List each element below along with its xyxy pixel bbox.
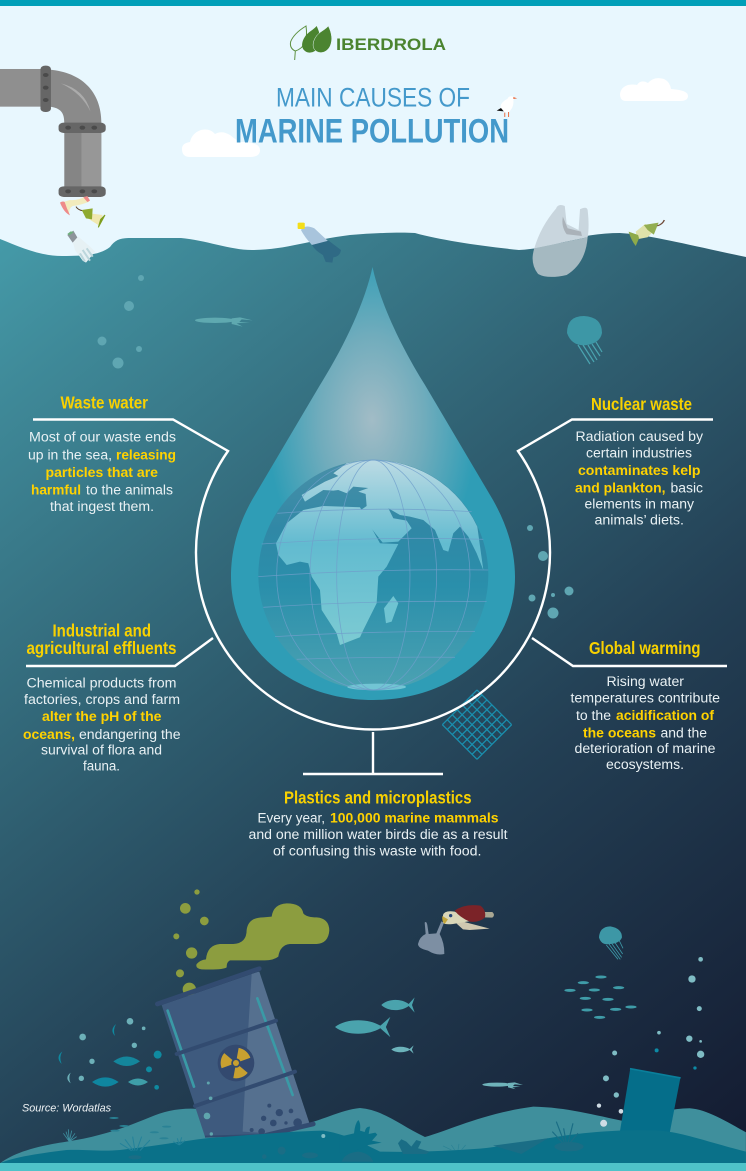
title line 1: MAIN CAUSES OF xyxy=(276,82,470,112)
leader lower left xyxy=(26,638,213,666)
title xyxy=(235,82,509,150)
globe xyxy=(258,460,488,690)
icon: drain pipe xyxy=(0,66,106,197)
body text: alter the pH of the xyxy=(42,709,162,724)
body text xyxy=(28,430,176,514)
water drop with globe xyxy=(231,267,515,700)
heading: Plastics and microplastics xyxy=(284,788,472,808)
radiation symbol xyxy=(218,1045,254,1081)
upper bubbles xyxy=(98,275,144,368)
floating glove xyxy=(67,231,95,263)
seabed plants and rocks xyxy=(63,1117,325,1159)
bag xyxy=(418,921,444,955)
body text: and plankton, xyxy=(575,480,666,496)
body text: Most of our waste ends xyxy=(29,430,176,444)
pear core floating xyxy=(629,220,664,246)
icon: turtle with plastic bag xyxy=(418,905,494,955)
body text: particles that are xyxy=(46,465,158,480)
floating bottle xyxy=(298,223,341,263)
seabed plants right xyxy=(398,1122,584,1154)
body text: that ingest them. xyxy=(50,499,154,514)
heading: Nuclear waste xyxy=(591,394,692,414)
body text: to the xyxy=(576,708,611,723)
globe stand outline and leader lines xyxy=(26,420,727,774)
icon: toxic slime cloud xyxy=(173,889,329,996)
elbow xyxy=(50,70,101,123)
heading: Waste water xyxy=(60,392,148,412)
body text: Radiation caused by xyxy=(576,429,703,444)
body text: endangering the xyxy=(79,727,180,742)
body text: temperatures contribute xyxy=(570,690,720,706)
heading: agricultural effluents xyxy=(26,638,177,658)
body text: harmful xyxy=(31,482,81,498)
seabed front layer xyxy=(0,1130,746,1170)
three large fish xyxy=(335,997,415,1054)
body text: the oceans xyxy=(583,726,656,740)
vertical pipe xyxy=(64,132,83,187)
panel: waste water xyxy=(28,392,176,514)
drop xyxy=(231,267,515,700)
body text: oceans, xyxy=(23,727,75,742)
body text: ecosystems. xyxy=(606,757,684,772)
teal barrel xyxy=(620,1068,681,1133)
icon: jellyfish upper xyxy=(567,316,602,364)
body text: and the xyxy=(660,726,707,740)
land: Africa xyxy=(276,506,398,645)
school of small fish xyxy=(564,975,637,1019)
body text: Rising water xyxy=(606,674,685,689)
body text: and one million water birds die as a result xyxy=(248,827,508,842)
body text: fauna. xyxy=(83,758,120,774)
body text: elements in many xyxy=(584,496,694,512)
panel: global warming xyxy=(570,638,720,772)
source note: Source: Wordatlas xyxy=(22,1102,111,1114)
coral centre xyxy=(302,1120,382,1162)
globe grid xyxy=(258,460,488,690)
heading: Global warming xyxy=(589,638,700,658)
bottom bar xyxy=(0,1163,746,1171)
icon: squid xyxy=(195,317,253,327)
leader lower right xyxy=(532,638,727,666)
body text: acidification of xyxy=(616,708,715,723)
logo: Iberdrola xyxy=(290,26,446,60)
body text: to the animals xyxy=(86,482,173,498)
panel: nuclear waste xyxy=(575,394,703,528)
heading xyxy=(26,620,177,658)
body text: certain industries xyxy=(586,446,692,460)
right bubbles xyxy=(527,525,574,618)
horizontal pipe xyxy=(0,69,43,107)
body text xyxy=(248,810,508,858)
cloud right xyxy=(620,78,688,101)
icon: seagull xyxy=(497,96,517,117)
body text: releasing xyxy=(116,448,176,462)
icon: squid lower xyxy=(482,1082,523,1089)
logo leaves xyxy=(290,26,332,60)
falling rubbish: apple core, pear core xyxy=(60,196,105,227)
panel: plastics and microplastics xyxy=(248,788,508,858)
body text: 100,000 marine mammals xyxy=(330,810,498,826)
logo wordmark: IBERDROLA xyxy=(336,35,446,54)
icon: jellyfish lower xyxy=(599,926,623,959)
title line 2: MARINE POLLUTION xyxy=(235,112,509,150)
turtle xyxy=(485,912,494,918)
body text: survival of flora and xyxy=(41,742,162,758)
body text: deterioration of marine xyxy=(574,741,716,756)
body text: animals’ diets. xyxy=(594,512,684,528)
body text: contaminates kelp xyxy=(578,463,700,478)
body text: of confusing this waste with food. xyxy=(273,844,482,858)
stand xyxy=(303,732,443,774)
body text: Chemical products from xyxy=(26,676,176,690)
icon: radioactive barrel xyxy=(157,969,313,1137)
panel: industrial and agricultural effluents xyxy=(23,620,180,774)
land: Madagascar xyxy=(384,596,398,623)
top bar xyxy=(0,0,746,6)
land: Eurasia xyxy=(302,460,483,570)
flanges xyxy=(40,66,51,112)
body text: basic xyxy=(670,480,703,496)
fishing net xyxy=(442,690,512,759)
seabed back layer xyxy=(0,1107,746,1170)
body text xyxy=(23,676,180,774)
body text: Every year, xyxy=(258,810,325,826)
body text xyxy=(570,674,720,772)
body text: up in the sea, xyxy=(28,448,112,462)
right bubbles lower xyxy=(597,957,704,1127)
body text: factories, crops and farm xyxy=(24,692,180,707)
heading: Industrial and xyxy=(52,620,151,640)
plastic bag xyxy=(533,205,589,277)
cloud left xyxy=(182,130,260,157)
land: Antarctica xyxy=(347,684,406,690)
ring xyxy=(33,420,713,730)
fish and bubbles left of barrel xyxy=(58,1018,162,1090)
body text xyxy=(575,429,703,528)
